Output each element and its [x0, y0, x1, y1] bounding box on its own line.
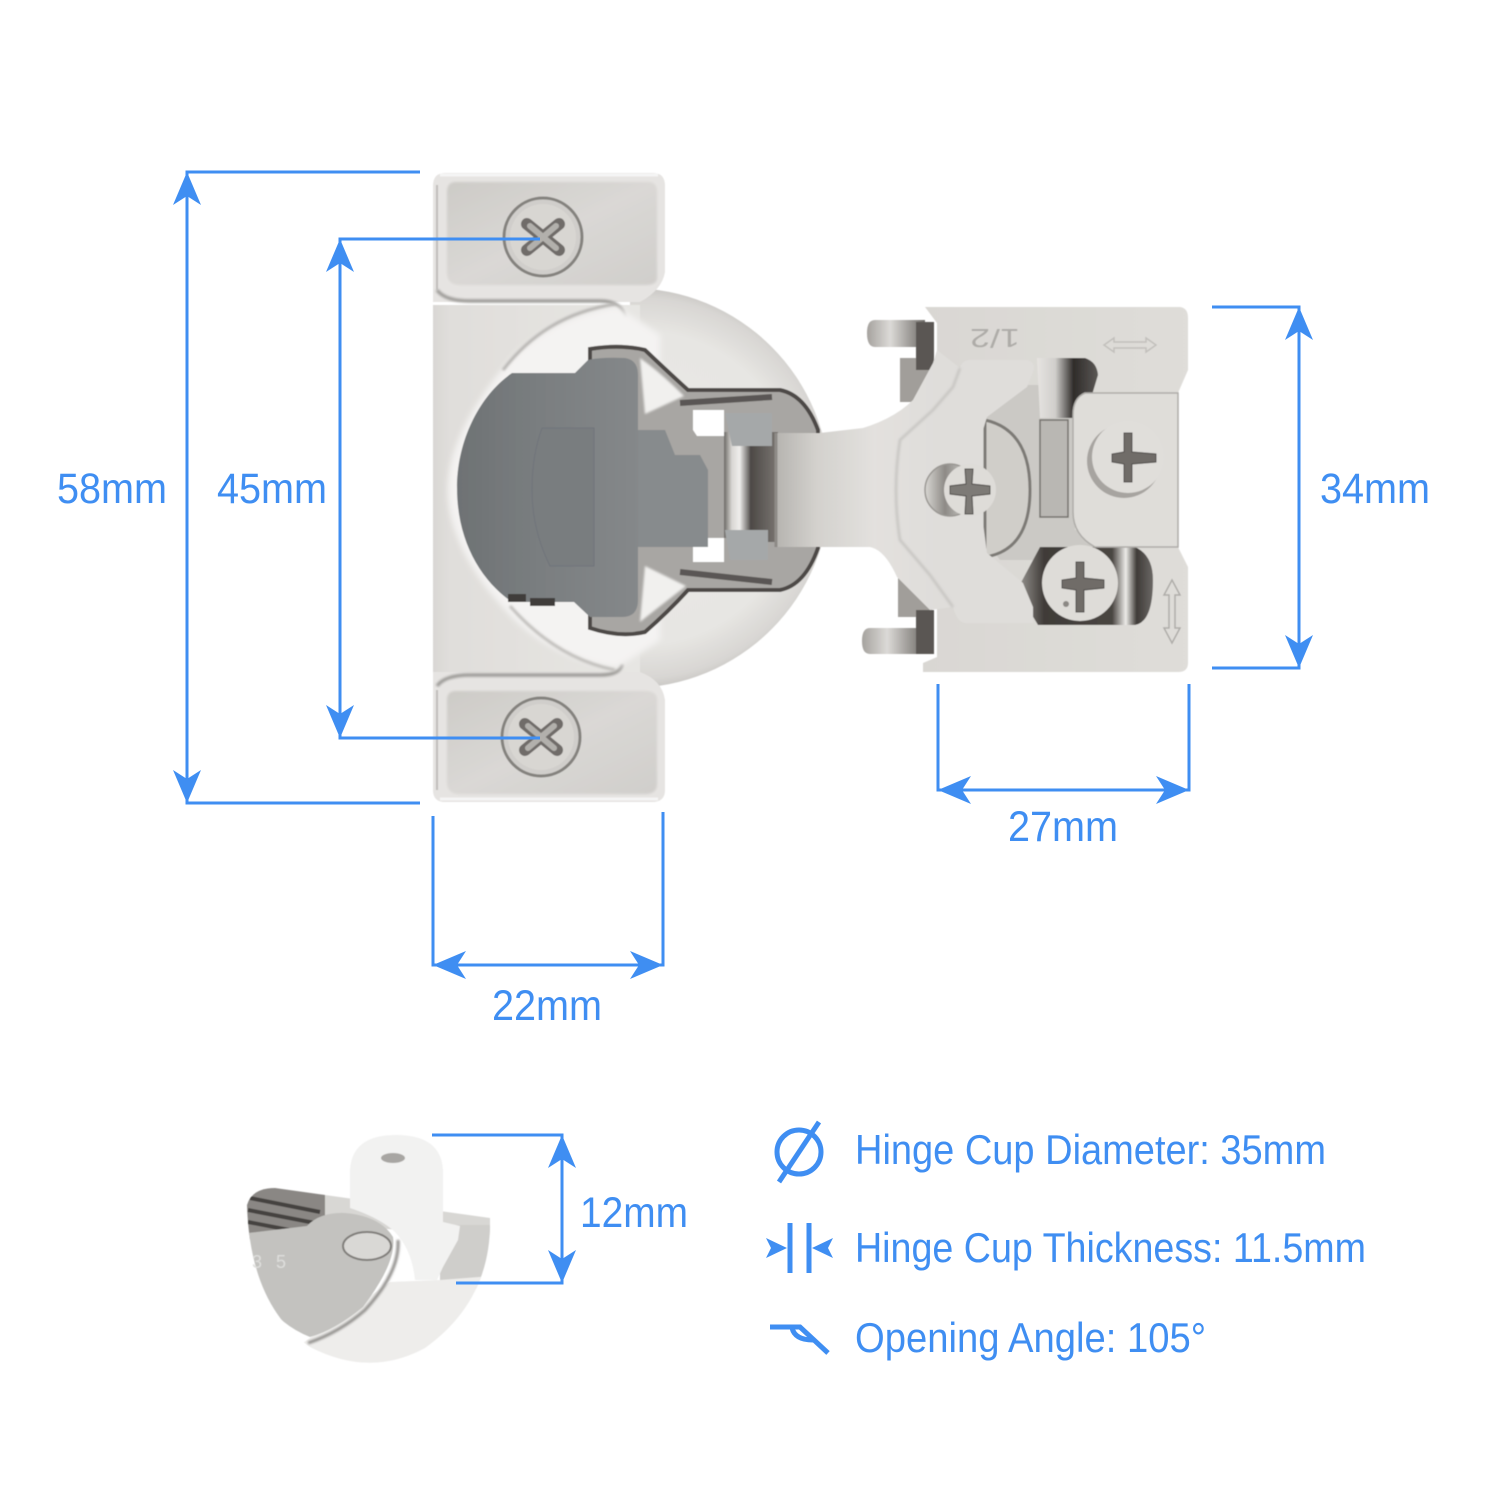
mounting plate	[433, 173, 665, 802]
arm and inner plate	[776, 350, 1034, 623]
dimension: 34mm arm height: 34mm	[1320, 465, 1430, 513]
mechanism cavity	[590, 347, 818, 634]
dimension: 22mm plate width: 22mm	[492, 982, 602, 1030]
hinge cup	[630, 288, 830, 688]
arm edge	[774, 433, 778, 547]
lower white area	[304, 1276, 481, 1363]
screw: right	[1087, 421, 1164, 498]
screw: bottom plate	[502, 698, 580, 776]
plastic damper	[638, 430, 708, 547]
threads	[246, 1187, 326, 1238]
inset photo: nylon dowel	[240, 1135, 492, 1375]
dimension: 45mm screw spacing: 45mm	[217, 465, 327, 513]
arm shadow	[750, 432, 778, 542]
screw: bottom	[1042, 545, 1118, 621]
metal leaf	[240, 1213, 393, 1337]
dimension: 12mm dowel	[432, 1135, 688, 1283]
arm crease	[896, 368, 960, 607]
right metal	[440, 1226, 490, 1280]
back rim	[324, 1194, 490, 1230]
crescent highlight	[448, 306, 660, 668]
centre oval recess	[985, 420, 1030, 557]
dimension: 27mm arm width	[938, 684, 1189, 851]
icon: diameter	[777, 1122, 821, 1182]
screw: left	[925, 464, 996, 516]
leaf shadow	[308, 1240, 398, 1343]
interior backing	[985, 385, 1100, 560]
rivet	[343, 1232, 391, 1260]
embossed digits: 3 5	[252, 1252, 286, 1272]
legend: opening angle: Opening Angle: 105°	[855, 1314, 1206, 1361]
embossed size mark: 1/2	[970, 323, 1020, 353]
icon: thickness	[766, 1223, 833, 1273]
hinge pin	[724, 432, 750, 538]
right adjustment plate	[1073, 393, 1178, 547]
legend: cup diameter: Hinge Cup Diameter: 35mm	[855, 1126, 1326, 1173]
upper slot	[1037, 358, 1098, 418]
hinge photo: main hinge	[433, 173, 830, 802]
nylon dowel	[350, 1135, 460, 1280]
cover clip	[508, 594, 555, 606]
crescent crease: top	[503, 304, 615, 370]
dimension: 27mm arm width: 27mm	[1008, 803, 1118, 851]
dimension: 45mm screw spacing	[217, 239, 540, 738]
lower slot	[1017, 547, 1153, 625]
thread lines	[248, 1198, 320, 1234]
clip: top	[867, 320, 934, 402]
dimension: 58mm height: 58mm	[57, 465, 167, 513]
icon: opening angle	[770, 1327, 828, 1353]
white windows	[693, 410, 724, 562]
crescent crease: bottom	[510, 606, 615, 670]
dimension: 34mm arm height	[1212, 307, 1430, 668]
hinge photo: mounting arm	[776, 307, 1188, 672]
grey cover	[457, 358, 638, 617]
dowel hole	[381, 1153, 405, 1163]
dimension: 22mm plate width	[433, 812, 663, 1030]
plastic caps	[725, 413, 772, 560]
cover emboss	[532, 428, 594, 566]
clip: bottom	[862, 575, 934, 654]
spring wires	[680, 397, 772, 582]
chrome reflections	[640, 358, 686, 622]
screw: top plate	[504, 198, 582, 276]
embossed arrow: vertical	[1164, 580, 1180, 643]
dimension: 58mm height	[57, 172, 420, 803]
base plate	[923, 307, 1188, 672]
dimension: 12mm dowel: 12mm	[580, 1189, 688, 1237]
legend: cup thickness: Hinge Cup Thickness: 11.5mm	[855, 1224, 1366, 1271]
centre metal strip	[1040, 420, 1068, 517]
embossed arrow: horizontal	[1104, 338, 1156, 352]
